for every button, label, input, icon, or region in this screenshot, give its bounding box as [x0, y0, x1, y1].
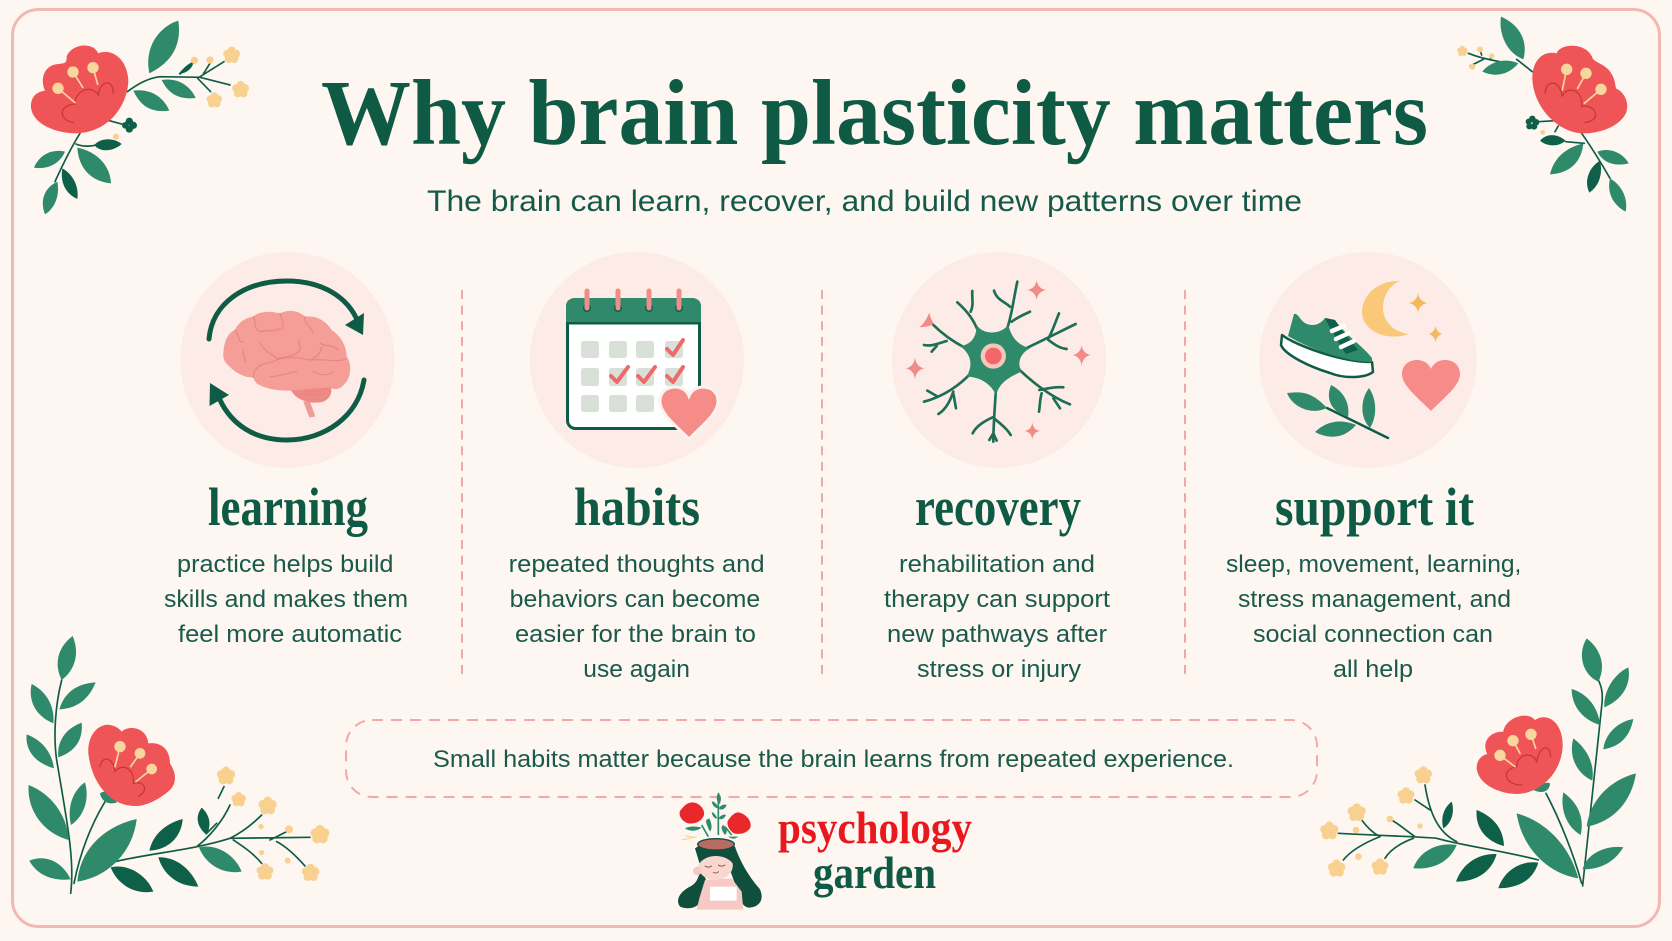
text: recovery description: stress or injury	[917, 656, 1081, 683]
text: recovery description: therapy can support	[884, 586, 1110, 613]
text: support description: social connection can	[1253, 621, 1493, 648]
text: recovery description	[884, 551, 1110, 683]
logo illustration: girl with flowers growing from head	[678, 792, 762, 910]
panel: learning	[164, 252, 408, 648]
heading: recovery: recovery	[915, 477, 1081, 537]
callout: Small habits matter because the brain learns from repeated experience.	[433, 746, 1234, 773]
floral corner: bottom right	[1320, 638, 1636, 888]
heading: support it: support it	[1275, 477, 1474, 537]
heading: learning: learning	[208, 477, 368, 537]
icon: neuron with sparkles	[892, 252, 1106, 468]
text: learning description: practice helps build	[177, 551, 394, 578]
floral corner: bottom left	[27, 636, 329, 893]
text: support description: sleep, movement, learning,	[1226, 551, 1521, 578]
text: support description: stress management, and	[1238, 586, 1511, 613]
text: support description: all help	[1333, 656, 1413, 683]
floral corner: top right	[1457, 17, 1629, 212]
text: habits description: behaviors can become	[510, 586, 760, 613]
logo wordmark: garden: garden	[813, 847, 936, 898]
title: Why brain plasticity matters	[321, 62, 1428, 165]
text: learning description	[164, 551, 408, 648]
text: habits description: use again	[583, 656, 690, 683]
text: learning description: skills and makes them	[164, 586, 408, 613]
logo wordmark: psychology: psychology	[778, 802, 972, 853]
icon: brain with cycle arrows	[180, 252, 394, 468]
icon: shoe, moon, heart and leaves	[1260, 252, 1476, 468]
text: habits description: easier for the brain to	[515, 621, 756, 648]
text: habits description	[509, 551, 765, 683]
panel: recovery	[884, 252, 1110, 683]
callout	[346, 720, 1317, 797]
text: recovery description: rehabilitation and	[899, 551, 1095, 578]
subtitle: The brain can learn, recover, and build new patterns over time	[427, 185, 1302, 218]
panel: habits	[509, 252, 765, 683]
logo: psychology garden	[678, 792, 972, 910]
panel: support it	[1226, 252, 1521, 683]
icon: calendar with heart	[530, 252, 744, 468]
text: habits description: repeated thoughts and	[509, 551, 765, 578]
text: learning description: feel more automatic	[178, 621, 402, 648]
floral corner: top left	[31, 21, 249, 214]
text: support description	[1226, 551, 1521, 683]
text: recovery description: new pathways after	[887, 621, 1107, 648]
heading: habits: habits	[574, 477, 700, 537]
